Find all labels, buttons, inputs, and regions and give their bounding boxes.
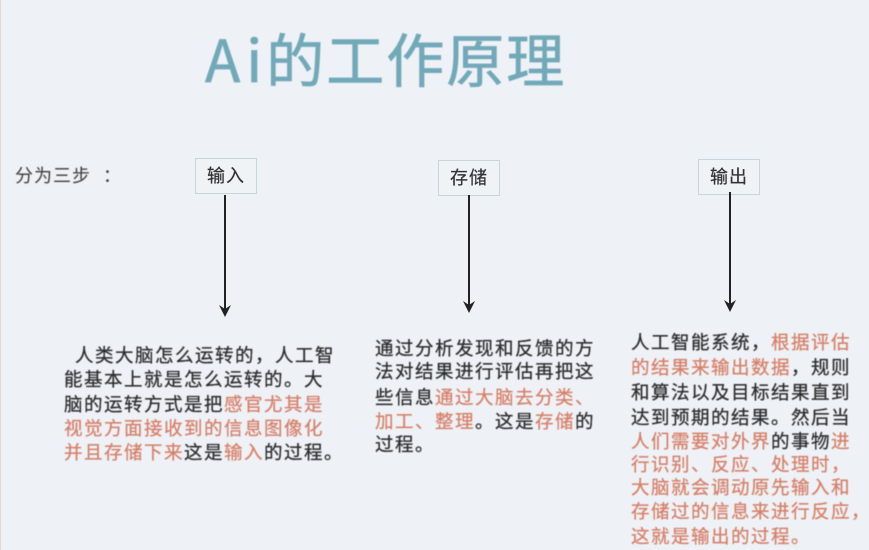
arrow: output	[724, 192, 736, 312]
box: input: 输入	[207, 166, 245, 186]
text block: input	[64, 345, 344, 463]
text block: input: 视觉方面接收到的信息图像化	[64, 418, 324, 439]
text block: output: 这就是输出的过程。	[631, 526, 811, 547]
text block: output: 存储过的信息来进行反应，	[631, 501, 869, 522]
text block: output: 行识别、反应、处理时，	[631, 454, 851, 475]
text block: output: 人们需要对外界的事物进	[631, 431, 851, 452]
text block: storage: 些信息通过大脑去分类、	[375, 387, 595, 408]
text block: input: 并且存储下来这是输入的过程。	[64, 442, 344, 463]
text block: storage: 通过分析发现和反馈的方	[375, 338, 595, 359]
text block: storage: 过程。	[375, 434, 435, 455]
text block: output: 的结果来输出数据，规则	[631, 357, 851, 378]
text block: output: 达到预期的结果。然后当	[631, 407, 851, 428]
box: storage	[438, 160, 500, 196]
text block: output: 大脑就会调动原先输入和	[631, 477, 851, 498]
box: input	[195, 158, 257, 194]
text block: output: 和算法以及目标结果直到	[631, 382, 851, 403]
text block: input: 能基本上就是怎么运转的。大	[64, 369, 324, 390]
text block: input: 脑的运转方式是把感官尤其是	[64, 394, 324, 415]
text block: output: 人工智能系统，根据评估	[631, 332, 851, 353]
arrow: storage	[463, 195, 475, 313]
box: output: 输出	[710, 167, 748, 187]
box: storage: 存储	[450, 168, 488, 188]
text block: storage	[374, 338, 595, 455]
text block: storage: 法对结果进行评估再把这	[375, 361, 595, 382]
title: Ai的工作原理	[205, 15, 566, 99]
box: output	[698, 159, 760, 195]
arrow: input	[219, 195, 231, 317]
label: three steps: 分为三步 ：	[15, 166, 122, 186]
text block: input: 人类大脑怎么运转的，人工智	[75, 345, 335, 366]
left edge strip	[0, 0, 1, 550]
text block: storage: 加工、整理。这是存储的	[375, 411, 595, 432]
text block: output	[630, 332, 869, 547]
